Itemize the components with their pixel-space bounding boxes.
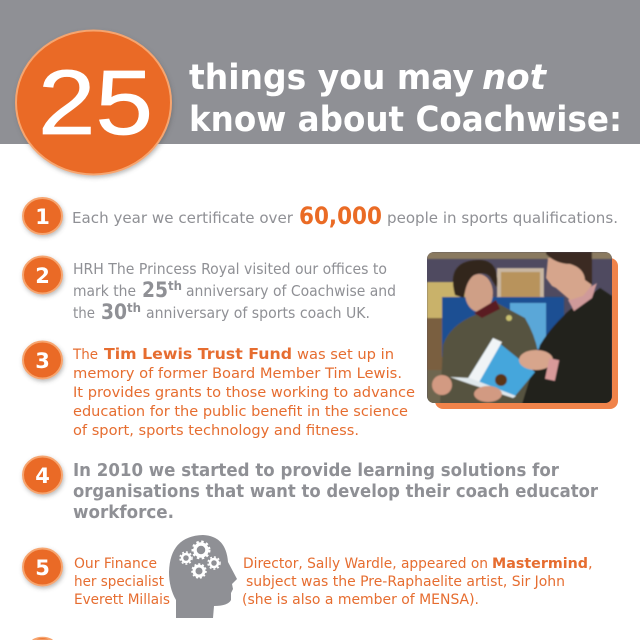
item 2	[23, 256, 396, 324]
item 2: 30	[101, 300, 127, 324]
item 2: HRH The Princess Royal visited our offices to	[73, 260, 387, 278]
header band	[0, 0, 640, 144]
item 5: Mastermind	[492, 556, 588, 572]
title: not	[482, 58, 547, 98]
item 4	[23, 456, 598, 523]
item 5: subject was the Pre-Raphaelite artist, Sir John	[246, 574, 565, 590]
item 2: anniversary of sports coach UK.	[146, 304, 370, 322]
photo: Princess Royal reading with colleague	[427, 252, 618, 409]
item 1: Each year we certificate over	[72, 209, 294, 227]
item 2: th	[168, 279, 182, 293]
item 1	[23, 198, 618, 234]
item 3: 3	[35, 349, 50, 373]
title: things you may	[189, 58, 474, 98]
item 3	[23, 342, 415, 439]
item 2: 2	[35, 264, 50, 288]
item 1: 60,000	[299, 202, 382, 230]
big 25 badge	[16, 30, 171, 174]
item 5: ,	[588, 556, 593, 572]
item 3: Tim Lewis Trust Fund	[104, 345, 292, 363]
item 3: of sport, sports technology and fitness.	[73, 423, 359, 439]
item 2: th	[127, 301, 141, 315]
title	[189, 58, 622, 140]
item 4: 4	[35, 464, 50, 488]
item 1: 1	[35, 205, 50, 229]
item 3: education for the public benefit in the science	[73, 404, 408, 420]
item 1: people in sports qualifications.	[387, 209, 618, 227]
item 2: the	[73, 304, 95, 322]
princess	[440, 303, 540, 404]
icon: head with gears	[169, 535, 237, 618]
item 4: In 2010 we started to provide learning solutions for	[73, 460, 559, 481]
item 4: organisations that want to develop their coach educator	[73, 481, 598, 502]
item 4: workforce.	[73, 502, 174, 523]
item 2: mark the	[73, 282, 136, 300]
item 3: The	[72, 347, 98, 363]
magazine	[479, 344, 536, 396]
item 3: was set up in	[297, 347, 394, 363]
item 5: Our Finance	[74, 556, 157, 572]
item 5	[23, 535, 593, 618]
item 5: 5	[35, 556, 50, 580]
item 5: (she is also a member of MENSA).	[242, 592, 479, 608]
item 2: 25	[142, 278, 168, 302]
man	[522, 288, 612, 404]
big 25 badge: 25	[38, 52, 153, 154]
hands	[432, 375, 452, 395]
item 6 badge (cropped)	[33, 637, 52, 640]
item 3: memory of former Board Member Tim Lewis.	[73, 366, 402, 382]
item 2: anniversary of Coachwise and	[186, 282, 396, 300]
item 5: her specialist	[74, 574, 164, 590]
item 5: Director, Sally Wardle, appeared on	[243, 556, 488, 572]
item 5: Everett Millais	[74, 592, 170, 608]
item 3: It provides grants to those working to advance	[73, 385, 415, 401]
